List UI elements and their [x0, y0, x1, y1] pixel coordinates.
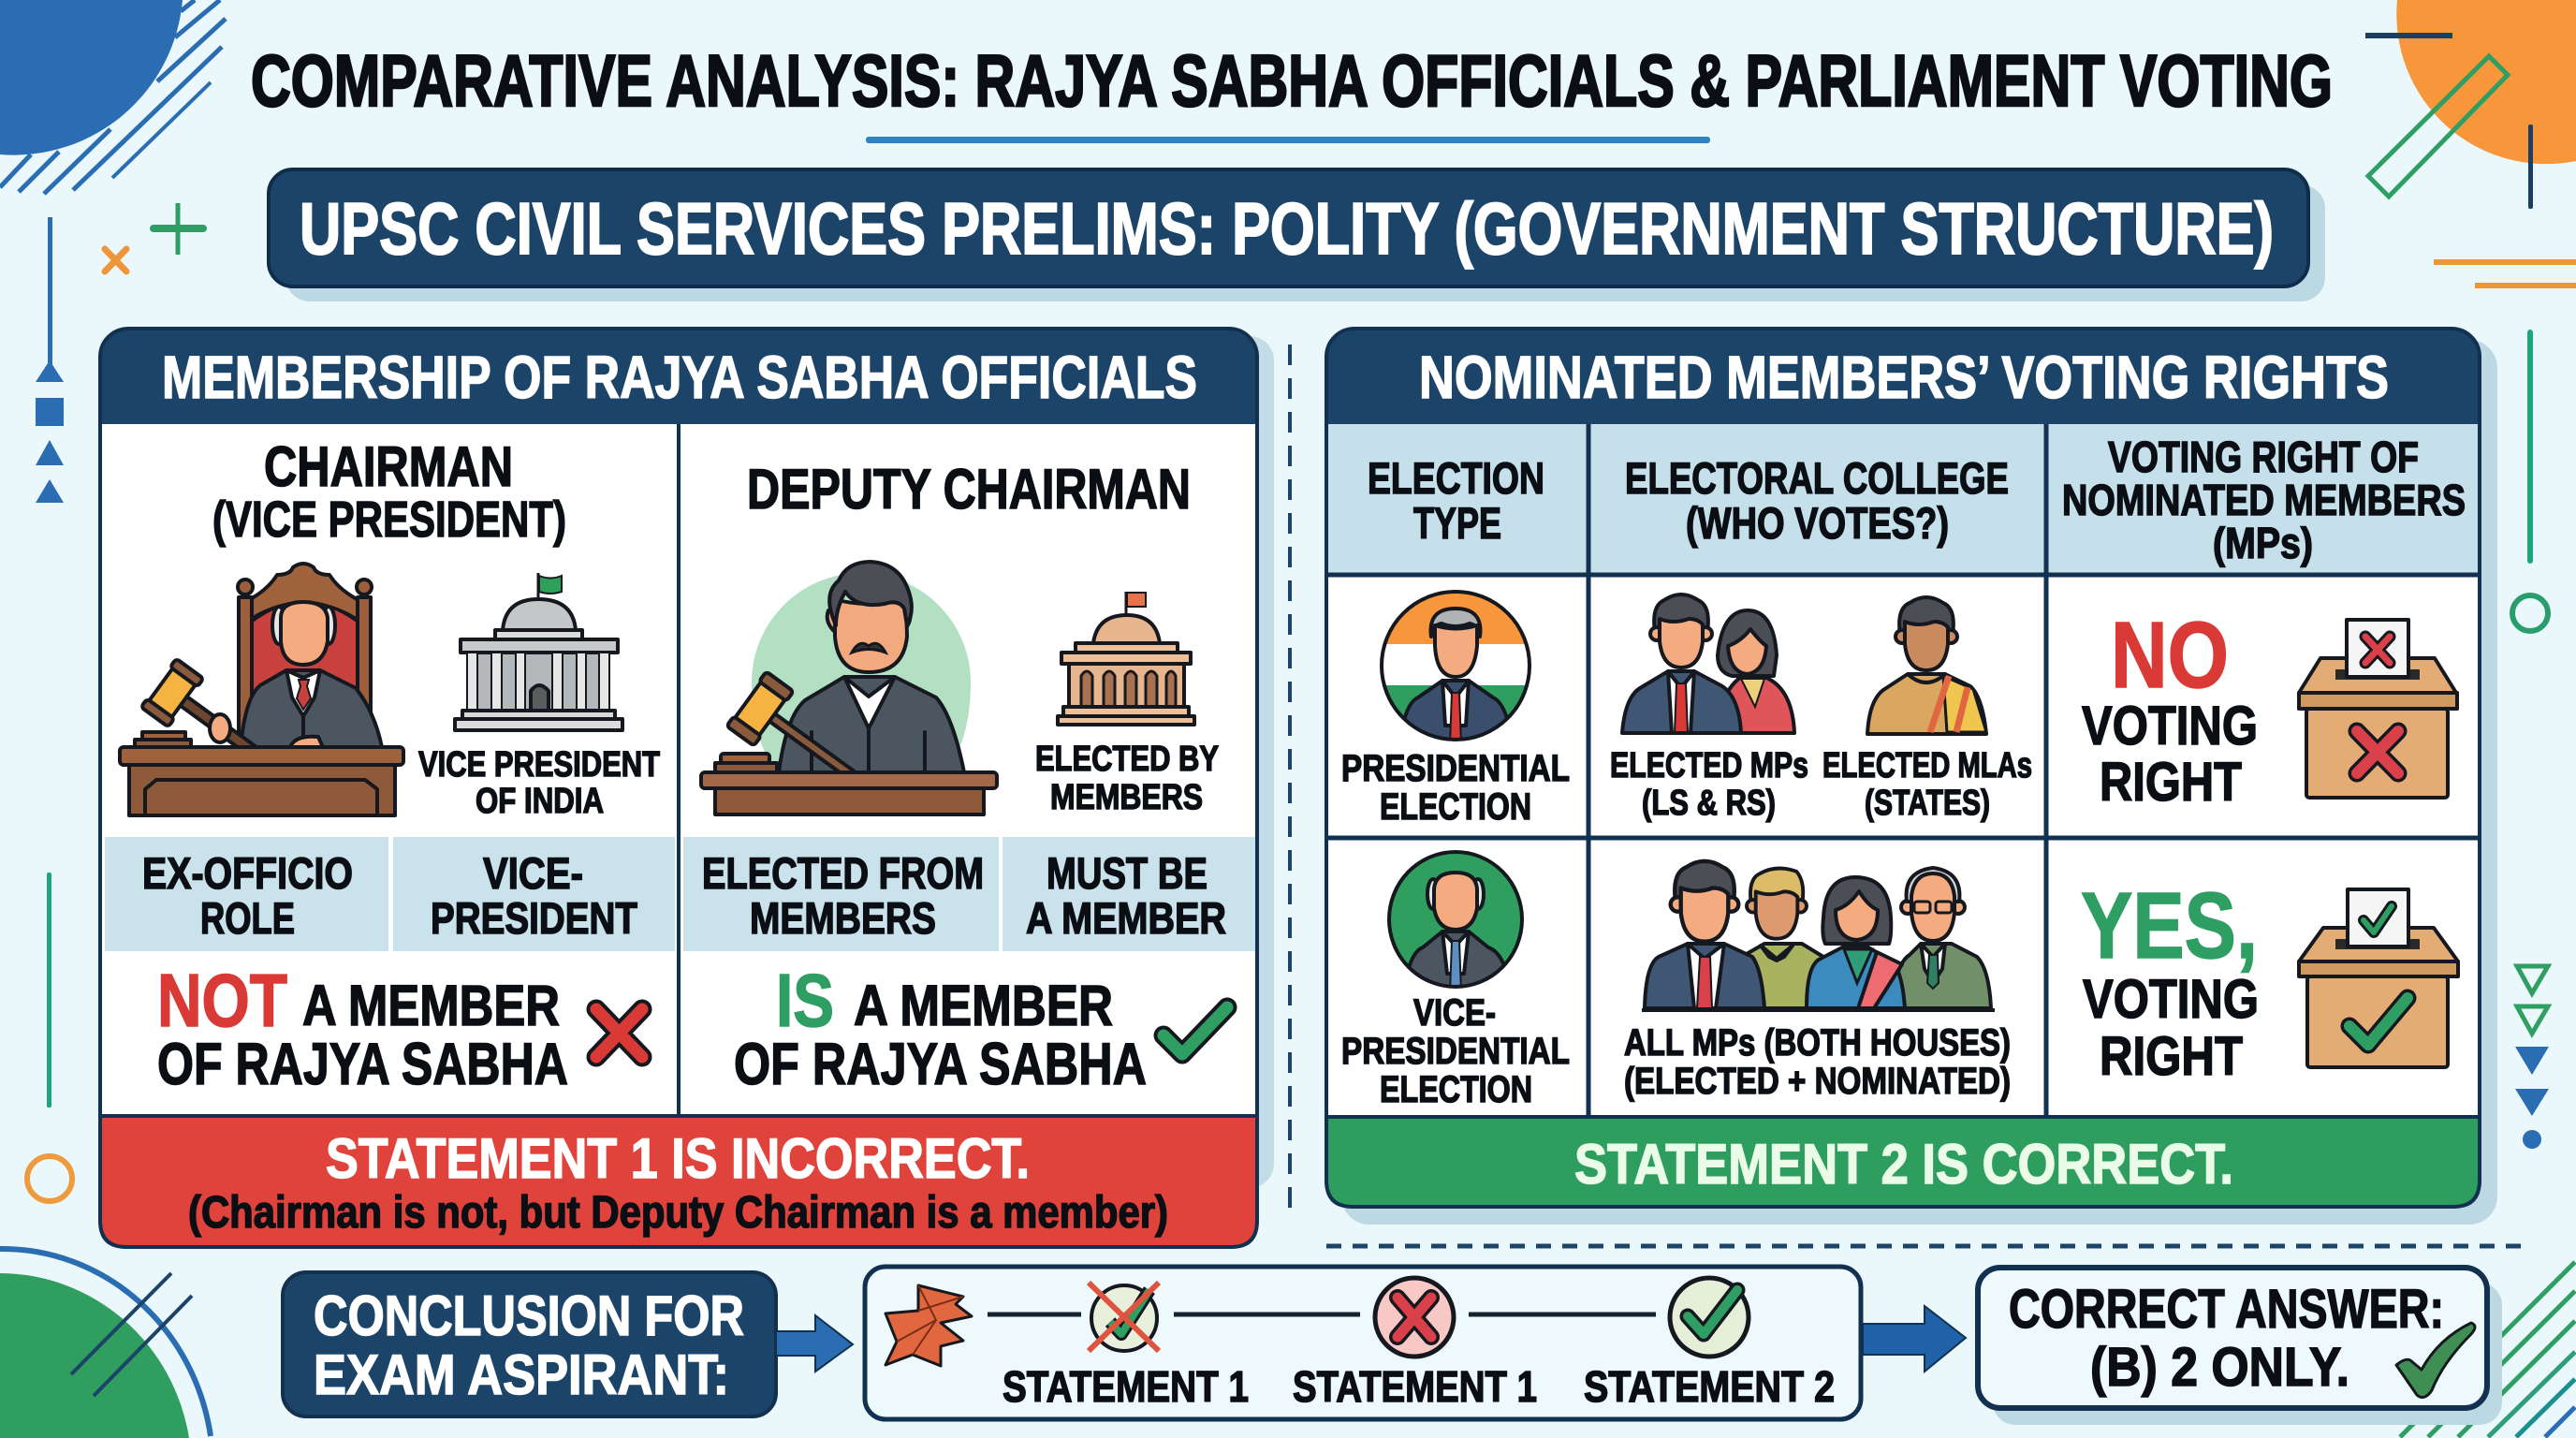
icon: vice president building	[455, 573, 622, 730]
label: vice-presidential election: VICE-	[1413, 992, 1496, 1034]
conclusion label: CONCLUSION FOR	[314, 1284, 744, 1347]
cell: must be a member: A MEMBER	[1026, 893, 1226, 943]
label: elected MPs: (LS & RS)	[1642, 784, 1776, 823]
label: presidential election: PRESIDENTIAL	[1341, 748, 1570, 789]
cell: ex-officio role: ROLE	[200, 893, 295, 943]
column heading: chairman: (VICE PRESIDENT)	[212, 492, 566, 548]
column header: electoral college: (WHO VOTES?)	[1686, 498, 1949, 548]
verdict band: statement 1 incorrect: STATEMENT 1 IS INCORRECT.	[326, 1127, 1030, 1190]
icon: red cross	[596, 1009, 642, 1057]
verdict: chairman not a member: NOT	[157, 959, 287, 1042]
column header: electoral college: ELECTORAL COLLEGE	[1625, 453, 2009, 503]
column header: voting right: (MPs)	[2213, 519, 2313, 567]
label: elected MLAs: (STATES)	[1865, 784, 1990, 823]
label: vice president of India: OF INDIA	[476, 782, 604, 821]
verdict band: statement 2 correct: STATEMENT 2 IS CORRECT.	[1574, 1133, 2233, 1196]
conclusion label	[283, 1272, 776, 1416]
verdict band: statement 1 incorrect: (Chairman is not, but Deputy Chairman is a member)	[188, 1188, 1168, 1238]
column header: election type: ELECTION	[1368, 453, 1544, 503]
decoration: bottom-left green circle	[0, 1249, 211, 1438]
label: elected by members	[1035, 740, 1219, 817]
cell: ex-officio role: EX-OFFICIO	[142, 848, 353, 898]
verdict: yes voting right: VOTING	[2083, 969, 2259, 1030]
verdict: deputy chairman is a member	[734, 959, 1147, 1097]
panel: nominated members' voting rights	[1326, 329, 2497, 1225]
icon: red cross circle	[1375, 1278, 1454, 1357]
label: elected by members: MEMBERS	[1050, 778, 1203, 817]
correct answer box: CORRECT ANSWER:	[2009, 1279, 2444, 1340]
statements strip	[865, 1267, 1861, 1419]
label: statement 1 again: STATEMENT 1	[1293, 1362, 1537, 1411]
arrow: statements to answer	[1863, 1306, 1966, 1372]
label: vice-presidential election	[1341, 992, 1570, 1110]
verdict: yes voting right: RIGHT	[2100, 1026, 2243, 1087]
column header: voting right: VOTING RIGHT OF	[2108, 433, 2419, 481]
verdict band: statement 1 incorrect	[100, 1116, 1257, 1247]
verdict: no voting right: NO	[2111, 603, 2229, 708]
icon: ballot box with check	[2299, 889, 2458, 1067]
verdict: chairman not a member	[157, 959, 568, 1097]
icon: green check	[1164, 1007, 1227, 1054]
label: all MPs: (ELECTED + NOMINATED)	[1624, 1061, 2011, 1102]
cell: must be a member	[1003, 837, 1255, 951]
label: statement 1: STATEMENT 1	[1003, 1362, 1249, 1411]
cell: vice-president	[393, 837, 675, 951]
correct answer box	[1978, 1268, 2502, 1425]
icon: elected MLA	[1867, 597, 1986, 734]
label: elected MLAs	[1822, 746, 2032, 823]
label: vice president of India	[418, 745, 660, 821]
label: all MPs	[1624, 1022, 2011, 1102]
panel heading: nominated members: NOMINATED MEMBERS’ VOTING RIGHTS	[1419, 344, 2389, 411]
decoration: right side symbols	[2512, 330, 2549, 1149]
icon: chairman at desk with gavel	[120, 564, 403, 815]
verdict: yes voting right	[2081, 873, 2259, 1087]
verdict: deputy chairman is a member: OF RAJYA SABHA	[734, 1032, 1147, 1097]
icon: struck check	[1089, 1283, 1159, 1351]
subtitle banner	[269, 169, 2325, 301]
verdict: deputy chairman is a member: IS	[776, 959, 834, 1042]
label: all MPs: ALL MPs (BOTH HOUSES)	[1624, 1022, 2011, 1064]
verdict: no voting right: VOTING	[2082, 696, 2258, 756]
label: vice-presidential election: ELECTION	[1380, 1069, 1532, 1110]
label: elected MPs: ELECTED MPs	[1610, 746, 1808, 785]
arrow: conclusion to statements	[776, 1315, 853, 1372]
label: elected MPs	[1610, 746, 1808, 823]
cell: vice-president: VICE-	[483, 848, 583, 898]
column heading: deputy chairman: DEPUTY CHAIRMAN	[747, 458, 1191, 521]
divider: horizontal dashed	[1326, 1243, 2523, 1249]
verdict: chairman not a member: A MEMBER	[302, 974, 560, 1037]
icon: green check circle	[1670, 1278, 1749, 1357]
verdict: chairman not a member: OF RAJYA SABHA	[157, 1032, 568, 1097]
cell: ex-officio role	[105, 837, 388, 951]
conclusion label: EXAM ASPIRANT:	[314, 1343, 729, 1406]
cell: must be a member: MUST BE	[1046, 848, 1208, 898]
panel: membership of Rajya Sabha officials	[100, 329, 1274, 1247]
icon: crumpled paper	[886, 1285, 972, 1366]
verdict: yes voting right: YES,	[2081, 873, 2258, 978]
label: statement 2: STATEMENT 2	[1584, 1362, 1835, 1411]
column heading: chairman	[212, 435, 566, 548]
label: vice president of India: VICE PRESIDENT	[418, 745, 660, 785]
title underline	[866, 137, 1710, 143]
decoration: bottom-right stripes	[2400, 1262, 2575, 1437]
cell: elected from members	[683, 837, 999, 951]
column header: voting right: NOMINATED MEMBERS	[2062, 476, 2466, 524]
panel heading: membership: MEMBERSHIP OF RAJYA SABHA OFFICIALS	[162, 344, 1197, 411]
label: elected by members: ELECTED BY	[1035, 740, 1219, 779]
cell: elected from members: MEMBERS	[750, 893, 936, 943]
column header: electoral college	[1625, 453, 2009, 548]
divider: vertical dashed	[1288, 345, 1292, 1215]
column header: election type	[1368, 453, 1544, 548]
icon: president portrait	[1376, 590, 1535, 744]
column header: election type: TYPE	[1413, 498, 1501, 548]
column header: voting right	[2062, 433, 2466, 567]
icon: all MPs group	[1642, 861, 1995, 1012]
verdict: no voting right	[2082, 603, 2258, 813]
icon: vice president portrait	[1389, 852, 1522, 992]
correct answer box: (B) 2 ONLY.	[2090, 1337, 2349, 1398]
column heading: chairman: CHAIRMAN	[264, 435, 513, 498]
decoration: top-right orange circle and lines	[2365, 0, 2576, 288]
verdict band: statement 2 correct	[1326, 1117, 2480, 1207]
verdict: no voting right: RIGHT	[2100, 752, 2242, 813]
icon: deputy chairman at desk with gavel	[701, 562, 997, 814]
decoration: left side symbols	[27, 203, 203, 1201]
cell: elected from members: ELECTED FROM	[702, 848, 984, 898]
icon: answer check	[2396, 1323, 2475, 1398]
icon: ballot box with cross	[2299, 620, 2457, 798]
icon: elected MPs	[1622, 594, 1794, 735]
cell: vice-president: PRESIDENT	[431, 893, 637, 943]
label: presidential election	[1341, 748, 1570, 828]
label: presidential election: ELECTION	[1380, 786, 1531, 828]
decoration: top-left blue circle and stripes	[0, 0, 226, 194]
label: elected MLAs: ELECTED MLAs	[1822, 746, 2032, 785]
icon: elected by members building	[1058, 592, 1194, 725]
verdict: deputy chairman is a member: A MEMBER	[854, 974, 1113, 1037]
label: vice-presidential election: PRESIDENTIAL	[1341, 1031, 1570, 1072]
